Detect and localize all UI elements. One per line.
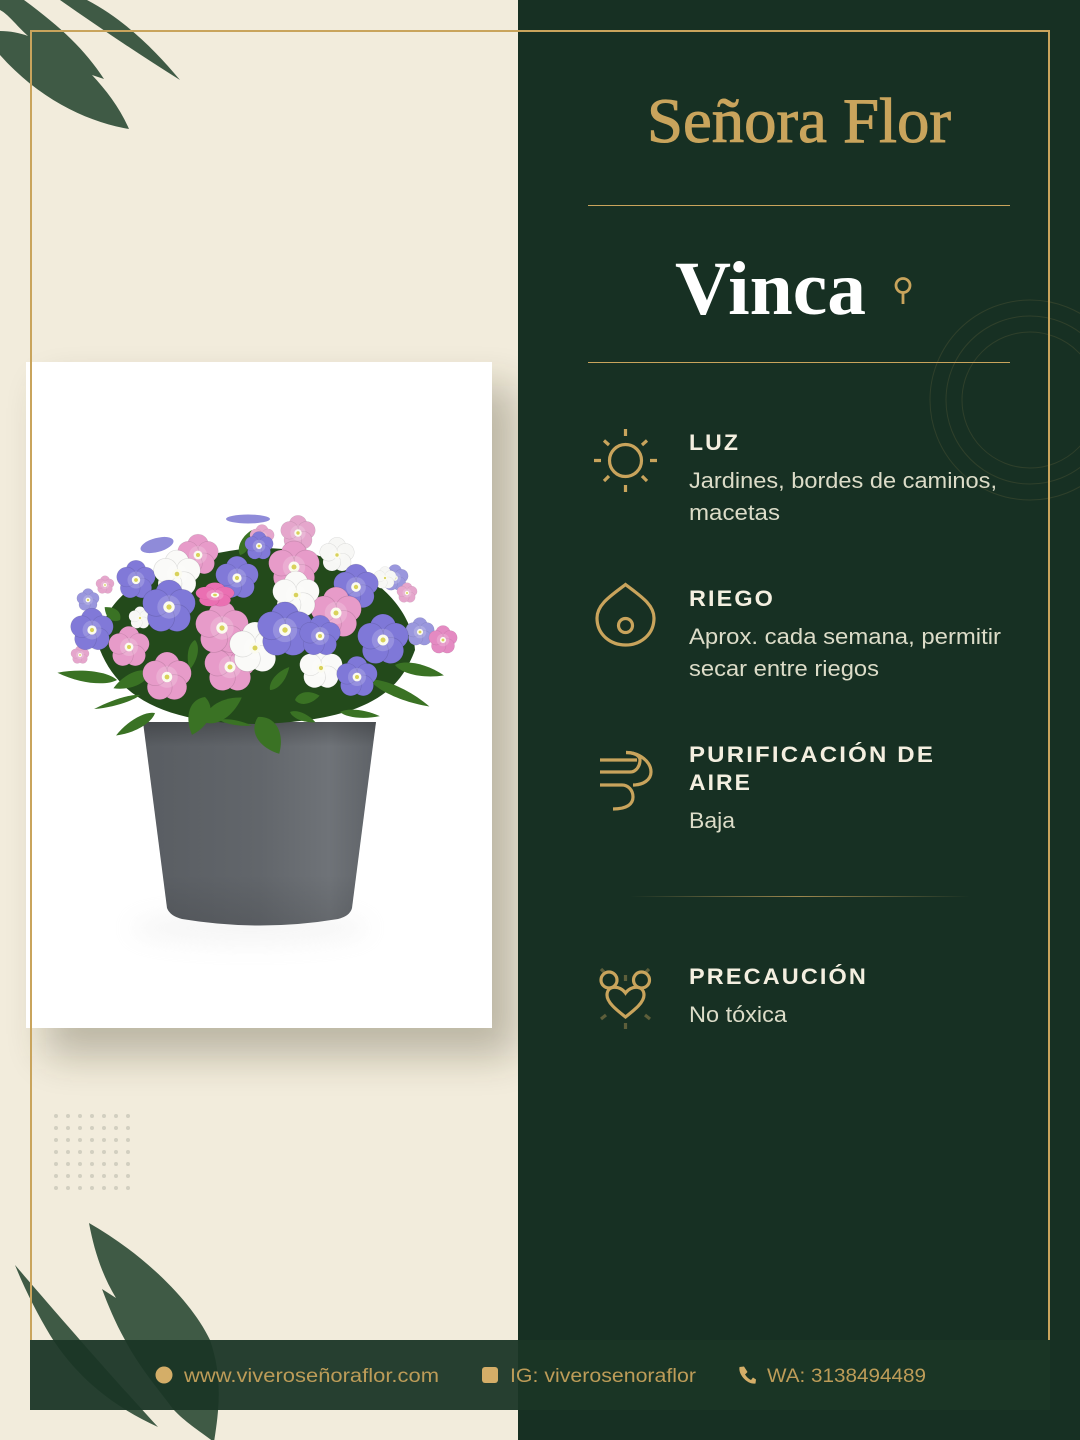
leaves: top-left corner [0,0,180,129]
foliage [57,528,445,759]
icon: water drop [597,584,654,645]
text luz: macetas [689,500,780,525]
text precaucion: No tóxica [689,1002,788,1027]
website: www.viveroseñoraflor.com [183,1366,439,1387]
panel: dark green right [518,0,1080,1440]
section: luz [594,429,997,525]
heading precaucion: PRECAUCIÓN [689,964,868,989]
pot shadow [130,912,370,944]
text baja: Baja [689,808,736,833]
instagram: IG: viverosenoraflor [510,1366,697,1387]
heading luz: LUZ [689,430,740,455]
brand title: Señora Flor [647,85,951,156]
section: precaucion [601,964,868,1029]
whatsapp: WA: 3138494489 [767,1366,926,1387]
decorative dot grid [54,1114,130,1190]
divider top [588,205,1010,206]
section: purificacion de aire [600,742,935,833]
plant pot [143,722,376,926]
flat top flowers [139,514,270,556]
icon: wind [600,752,651,809]
photo card shadow [46,386,516,1056]
leaves: bottom-left corner [15,1223,219,1440]
icon: web dot [156,1366,172,1384]
heading purificacion: PURIFICACIÓN DE [689,742,935,767]
heading purificacion: AIRE [689,770,752,795]
photo card: potted vinca [26,362,492,1028]
footer bar [30,1340,1050,1410]
text riego: Aprox. cada semana, permitir [689,624,1001,649]
plant name: Vinca [675,247,866,331]
vinca flowers [68,514,459,705]
icon: sun [594,429,657,492]
icon: key pin [896,278,910,304]
text luz: Jardines, bordes de caminos, [689,468,997,493]
text riego [689,624,1001,681]
icon: instagram square [482,1367,498,1383]
section divider [630,896,970,897]
text riego: secar entre riegos [689,656,879,681]
text luz [689,468,997,525]
icon: heart with rings [601,969,650,1029]
decorative concentric circles [930,300,1080,500]
heading purificacion [689,742,935,795]
section: riego [597,584,1001,681]
heading riego: RIEGO [689,586,775,611]
icon: phone [739,1366,756,1384]
divider below name [588,362,1010,363]
